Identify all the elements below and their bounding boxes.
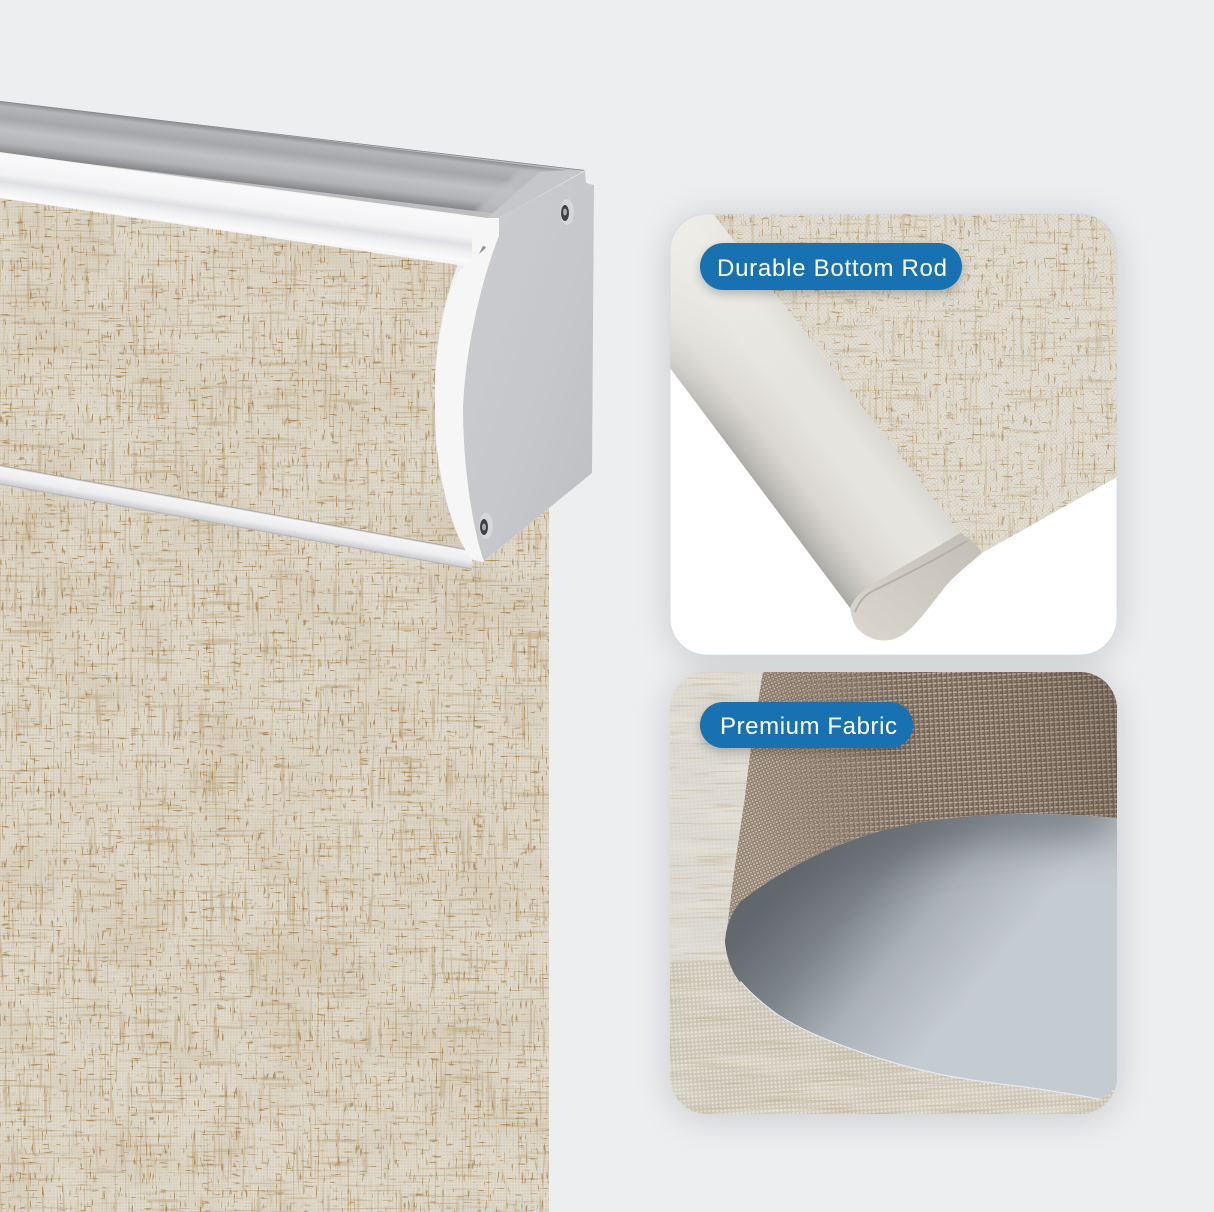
card shadow: bottom rod bbox=[670, 218, 1117, 659]
panel: premium fabric bbox=[670, 672, 1120, 1114]
top gray channel bbox=[0, 101, 585, 218]
badge: durable bottom rod: Durable Bottom Rod bbox=[717, 255, 947, 282]
badge: durable bottom rod bbox=[700, 243, 962, 290]
white front lip bbox=[0, 153, 487, 267]
screw top bbox=[560, 199, 574, 225]
screw bottom bbox=[479, 513, 493, 539]
lower white rail bbox=[0, 465, 472, 569]
rolled burlap face bbox=[725, 672, 1117, 942]
rod fabric bbox=[700, 214, 1120, 559]
panel: durable bottom rod bbox=[670, 214, 1120, 655]
base linen bbox=[670, 672, 1117, 1114]
end cap bbox=[435, 171, 594, 562]
badge: premium fabric: Premium Fabric bbox=[720, 713, 897, 740]
card shadow: fabric bbox=[670, 676, 1117, 1118]
rod body bbox=[670, 214, 960, 608]
rod end cap bbox=[850, 533, 982, 640]
upper cassette fabric bbox=[0, 198, 458, 536]
roller cassette headrail bbox=[0, 95, 600, 569]
badge shadow bbox=[700, 247, 962, 294]
gray backing bbox=[720, 805, 1120, 1105]
badge shadow bbox=[700, 706, 913, 752]
badge: premium fabric bbox=[700, 702, 913, 748]
fabric shade panel bbox=[0, 470, 549, 1212]
